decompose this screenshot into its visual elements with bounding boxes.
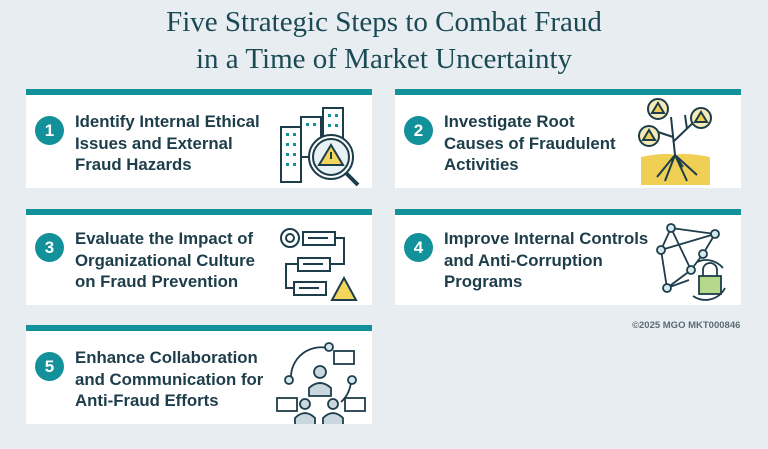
text step 5: and Communication for	[75, 370, 263, 388]
text step 1: Fraud Hazards	[75, 155, 192, 174]
text step 3: on Fraud Prevention	[75, 272, 238, 291]
text step 1: Issues and External	[75, 134, 233, 152]
text step 5: Anti-Fraud Efforts	[75, 391, 219, 410]
number 3	[35, 233, 64, 262]
title: Five Strategic Steps to Combat Fraud	[166, 6, 602, 38]
number 5: 5	[45, 357, 54, 376]
number 1	[35, 116, 64, 145]
icon: collaboration	[276, 342, 366, 424]
number 1: 1	[45, 121, 54, 140]
panel: step 1	[26, 89, 372, 188]
icon: tree with roots	[638, 98, 712, 185]
icon: process flow	[280, 228, 358, 301]
text step 3	[75, 229, 255, 291]
panel: step 3	[26, 209, 372, 305]
text step 2	[444, 112, 616, 174]
text step 5	[75, 348, 264, 410]
text step 4: Programs	[444, 272, 522, 291]
number 5	[35, 352, 64, 381]
text step 2: Investigate Root	[444, 112, 575, 131]
number 2	[404, 116, 433, 145]
icon: buildings with magnifier	[280, 107, 360, 186]
number 2: 2	[414, 121, 423, 140]
text step 2: Activities	[444, 155, 519, 174]
text step 5: Enhance Collaboration	[75, 348, 258, 367]
copyright: ©2025 MGO MKT000846	[632, 320, 740, 331]
panel: step 5	[26, 325, 372, 424]
panel: step 4	[395, 209, 741, 305]
icon: network lock	[656, 223, 726, 301]
text step 3: Evaluate the Impact of	[75, 229, 253, 248]
title	[166, 6, 602, 75]
text step 2: Causes of Fraudulent	[444, 134, 616, 152]
title: in a Time of Market Uncertainty	[196, 43, 572, 75]
text step 4: and Anti-Corruption	[444, 250, 603, 270]
text step 4: Improve Internal Controls	[444, 229, 648, 248]
panel: step 2	[395, 89, 741, 188]
text step 1	[75, 112, 260, 174]
number 4: 4	[414, 238, 423, 257]
number 3: 3	[45, 238, 54, 257]
number 4	[404, 233, 433, 262]
text step 3: Organizational Culture	[75, 250, 255, 270]
text step 4	[444, 229, 648, 291]
text step 1: Identify Internal Ethical	[75, 112, 260, 131]
